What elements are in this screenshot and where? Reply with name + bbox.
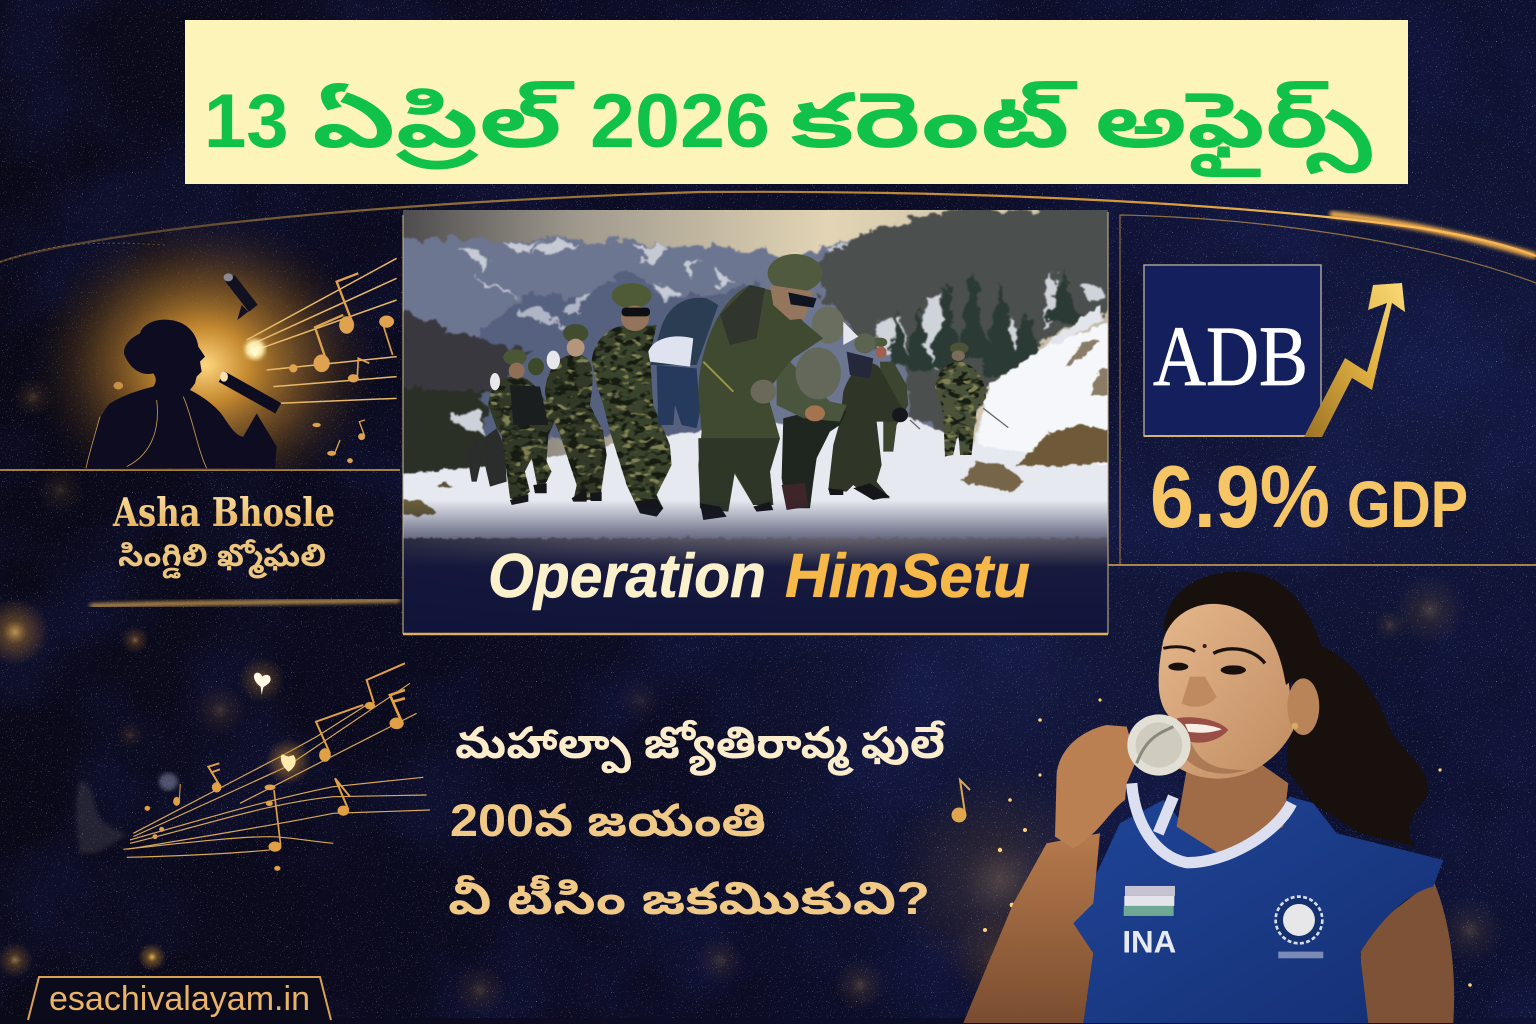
question line 2: 200వ జయంతి <box>450 795 766 846</box>
golden arc frame lines <box>0 192 1536 606</box>
icon: rising arrow <box>1304 283 1405 437</box>
title text: ఏప్రిల్ <box>312 79 575 170</box>
INA label: INA <box>1122 925 1176 960</box>
silver medal <box>1127 714 1191 776</box>
question line 3: వీ టీసిం జకమిుకువి? <box>448 873 930 924</box>
panel: ADB GDP forecast <box>1144 265 1468 546</box>
face <box>1159 604 1293 779</box>
medal ribbon <box>1132 783 1292 863</box>
silhouette <box>85 320 277 468</box>
title text: 13 <box>204 79 289 164</box>
title text <box>204 79 1373 178</box>
main soldier <box>698 254 823 512</box>
forearm <box>963 833 1100 1023</box>
title text: కరెంట్ <box>790 79 1078 164</box>
title banner <box>185 20 1408 184</box>
photo frame lines <box>403 212 1108 634</box>
heading: Operation HimSetu: HimSetu <box>785 542 1030 611</box>
backpack <box>648 298 718 428</box>
athlete with medal <box>963 572 1454 1023</box>
title text: 2026 <box>590 79 770 164</box>
soldier G <box>812 306 908 498</box>
soldiers <box>488 254 1008 520</box>
team emblem <box>1276 897 1323 958</box>
glowing star <box>265 738 312 785</box>
ADB logo <box>1144 265 1321 436</box>
icon: floating music notes <box>76 657 430 871</box>
hair <box>1163 572 1428 847</box>
jersey <box>1017 797 1443 1023</box>
microphones <box>222 377 278 408</box>
panel: Operation HimSetu photo <box>387 208 1123 635</box>
soldier B <box>545 324 607 500</box>
question line 1: మహాల్పా జ్యోతిరావ్మ ఫులే <box>455 719 946 776</box>
right arm <box>1360 880 1454 1023</box>
hand <box>1055 725 1137 848</box>
GDP figure <box>1150 447 1468 546</box>
text block: Telugu question <box>448 719 946 924</box>
snow <box>390 305 1123 538</box>
staff lines and notes <box>85 258 397 468</box>
photo fade to navy <box>403 500 1108 635</box>
heart <box>238 657 285 703</box>
far-right soldier <box>910 342 1008 457</box>
GDP figure: 6.9% <box>1150 447 1330 546</box>
heading: Operation HimSetu: Operation <box>488 542 766 611</box>
mountains and forest <box>387 208 1123 482</box>
panel: Asha Bhosle tribute <box>30 215 397 579</box>
far soldiers <box>467 428 507 487</box>
GDP figure: GDP <box>1347 467 1468 541</box>
facial features <box>1163 644 1265 774</box>
ADB logo: ADB <box>1153 308 1308 404</box>
boots <box>510 483 890 520</box>
icon: small note near athlete <box>952 780 970 822</box>
soldier A <box>488 349 555 502</box>
Telugu caption: సింగ్డిలి ఖ్మోఘలి <box>118 538 326 579</box>
website badge: esachivalayam.in <box>49 980 310 1018</box>
soldier C <box>592 283 672 513</box>
singer glow <box>39 222 369 470</box>
title text: అఫైర్స్ <box>1095 79 1373 178</box>
neck <box>1177 763 1288 858</box>
heading: Asha Bhosle: Asha Bhosle <box>112 490 335 536</box>
wounded soldier <box>751 347 847 510</box>
flag patch <box>1124 886 1175 916</box>
